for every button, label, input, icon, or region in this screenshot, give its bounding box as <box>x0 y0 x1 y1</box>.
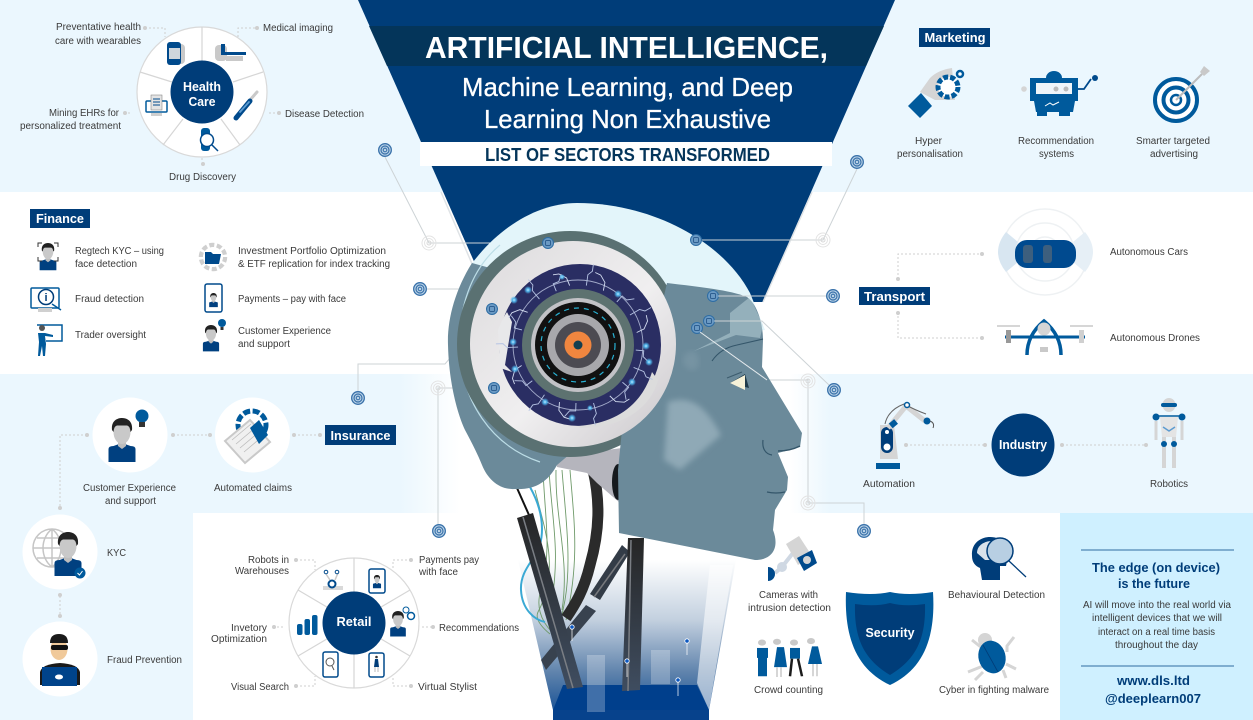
icon: phone with stylist <box>369 653 384 677</box>
head leader lines <box>700 296 829 385</box>
connectors <box>904 443 1148 447</box>
labels: and support <box>105 496 156 507</box>
blue wire <box>521 487 545 622</box>
tag: Finance <box>36 211 84 226</box>
callout links: @deeplearn007 <box>1105 691 1201 706</box>
callout body: AI will move into the real world via <box>1083 600 1231 611</box>
base indicator dots <box>570 625 689 696</box>
icon: target <box>1155 66 1210 121</box>
labels <box>863 479 1188 490</box>
icon: person bulb <box>203 319 226 351</box>
tag <box>919 28 990 47</box>
black cable <box>566 470 598 618</box>
icon: recommendation person <box>390 607 414 637</box>
labels: Investment Portfolio Optimization <box>238 246 386 257</box>
icon: inventory bars <box>297 615 318 635</box>
panel: insurance <box>22 398 396 696</box>
labels: Payments pay <box>419 555 479 566</box>
subtitle banner: LIST OF SECTORS TRANSFORMED <box>485 145 770 165</box>
icon: humanoid robot <box>1152 398 1186 468</box>
circle: automated claims <box>215 398 290 472</box>
labels: Preventative health <box>56 22 141 33</box>
labels: Customer Experience <box>83 483 176 494</box>
icon: camera <box>768 536 817 581</box>
icon: test pen <box>236 92 257 118</box>
labels: Robotics <box>1150 479 1188 490</box>
icon: medical imaging <box>215 44 246 61</box>
icon: fraud monitor: i <box>44 292 48 304</box>
labels <box>748 590 1049 696</box>
icon: autonomous car <box>998 209 1093 295</box>
circuit disc <box>496 264 661 428</box>
labels: personalized treatment <box>20 121 121 132</box>
green wires <box>535 470 575 634</box>
labels: Customer Experience <box>238 326 331 337</box>
labels: Virtual Stylist <box>418 682 477 693</box>
labels <box>83 483 292 666</box>
labels: Medical imaging <box>263 23 333 34</box>
labels: Recommendation <box>1018 136 1094 147</box>
helmet rim highlight <box>460 245 540 462</box>
helmet glass <box>470 203 765 340</box>
callout body: intelligent devices that we will <box>1092 613 1222 624</box>
thin cable <box>517 488 529 515</box>
base platform <box>518 560 736 720</box>
panel: finance <box>30 209 390 356</box>
labels: and support <box>238 339 290 350</box>
icon: hand with gear <box>908 68 963 118</box>
icon: autonomous drone <box>997 321 1093 355</box>
panel: industry <box>863 398 1188 490</box>
labels <box>75 246 390 350</box>
labels: KYC <box>107 548 126 559</box>
labels: care with wearables <box>55 36 141 47</box>
icon: face scan <box>38 243 58 270</box>
icon: trader <box>37 325 62 356</box>
wheel: Health <box>183 79 221 94</box>
labels: Autonomous Drones <box>1110 333 1200 344</box>
panel: health care <box>20 22 364 183</box>
circle: KYC <box>22 514 98 590</box>
panel: edge callout <box>1060 513 1253 720</box>
labels: Smarter targeted <box>1136 136 1210 147</box>
labels: Crowd counting <box>754 685 823 696</box>
callout body: throughout the day <box>1115 640 1198 651</box>
wheel <box>289 558 419 688</box>
callout heading: is the future <box>1118 576 1190 591</box>
labels <box>20 22 364 183</box>
background: left band <box>0 374 400 720</box>
icon: watch <box>167 42 185 65</box>
labels: Behavioural Detection <box>948 590 1045 601</box>
icon: phone with face <box>369 569 385 593</box>
title line three: Learning Non Exhaustive <box>484 104 771 134</box>
title line one: ARTIFICIAL INTELLIGENCE, <box>425 30 828 65</box>
labels: Mining EHRs for <box>49 108 120 119</box>
labels: Payments – pay with face <box>238 294 346 305</box>
connectors <box>123 26 281 166</box>
panel: transport <box>859 209 1200 355</box>
labels: Invetory <box>231 623 267 634</box>
background: right band fade <box>790 374 830 513</box>
labels: systems <box>1039 149 1074 160</box>
labels: Cameras with <box>759 590 818 601</box>
labels: intrusion detection <box>748 603 831 614</box>
connectors <box>896 252 984 340</box>
icon: behavioural head <box>972 537 1026 580</box>
title line two: Machine Learning, and Deep <box>462 72 793 102</box>
labels: personalisation <box>897 149 963 160</box>
tag: Insurance <box>330 428 390 443</box>
labels: Visual Search <box>231 682 289 693</box>
icon: robot arm <box>876 402 934 469</box>
icon: recommendation machine <box>1021 71 1098 116</box>
background: right band <box>830 374 1253 513</box>
icon: magnifier vial <box>200 128 218 151</box>
connectors <box>58 433 322 618</box>
target markers <box>351 143 871 538</box>
tag <box>30 209 90 228</box>
connectors <box>272 558 435 688</box>
labels: Recommendations <box>439 623 519 634</box>
icon: phone search <box>323 652 338 677</box>
dark ring <box>457 231 683 457</box>
hub: Industry <box>999 437 1048 452</box>
labels: Disease Detection <box>285 109 364 120</box>
labels: Cyber in fighting malware <box>939 685 1049 696</box>
background: top band <box>0 0 1253 192</box>
robot head illustration <box>448 203 802 720</box>
labels: Regtech KYC – using <box>75 246 164 257</box>
labels: Drug Discovery <box>169 172 236 183</box>
subtitle banner <box>420 142 832 166</box>
neck knob <box>612 464 624 500</box>
labels: with face <box>418 567 458 578</box>
icon: crowd <box>757 638 822 677</box>
labels: Fraud Prevention <box>107 655 182 666</box>
callout heading: The edge (on device) <box>1092 560 1220 575</box>
neck <box>555 448 622 503</box>
tag <box>325 425 396 445</box>
background: left band fade <box>400 374 460 513</box>
slanted arm <box>517 513 583 689</box>
leader lines <box>358 157 864 525</box>
icon: health records <box>146 95 167 116</box>
labels: Robots in <box>248 555 289 566</box>
labels: Trader oversight <box>75 330 146 341</box>
background: retail panel <box>193 513 493 720</box>
labels: Optimization <box>211 634 267 645</box>
wheel <box>137 27 267 157</box>
tag: Marketing <box>924 30 986 45</box>
labels: Automated claims <box>214 483 292 494</box>
vertical arm <box>622 538 644 691</box>
labels <box>211 555 519 693</box>
circle: fraud prevention <box>22 622 98 696</box>
head nodes <box>486 234 718 394</box>
wheel: Care <box>188 94 216 109</box>
callout heading <box>1092 560 1220 591</box>
labels: face detection <box>75 259 137 270</box>
shield <box>846 592 933 685</box>
title <box>420 30 832 166</box>
back of head <box>448 263 610 489</box>
icon: phone face <box>205 284 222 312</box>
wheel: Retail <box>336 614 372 629</box>
callout body: interact on a real time basis <box>1098 627 1215 638</box>
silver disc <box>470 241 676 447</box>
panel: marketing <box>897 28 1210 160</box>
labels: Fraud detection <box>75 294 144 305</box>
icon: warehouse robot <box>323 570 343 590</box>
hub <box>992 414 1054 476</box>
labels: Warehouses <box>235 566 289 577</box>
tag: Transport <box>864 289 926 304</box>
callout links: www.dls.ltd <box>1116 673 1190 688</box>
eye lens rings <box>522 289 634 401</box>
shield: Security <box>866 626 915 640</box>
labels: Autonomous Cars <box>1110 247 1188 258</box>
icon: portfolio gear <box>201 245 225 269</box>
panel: security <box>748 536 1049 696</box>
face <box>618 283 802 560</box>
circle: customer experience <box>92 398 168 472</box>
labels <box>897 136 1210 160</box>
labels: advertising <box>1150 149 1198 160</box>
labels <box>1110 247 1200 344</box>
labels: Automation <box>863 479 915 490</box>
callout body <box>1083 600 1231 651</box>
icon: fraud monitor <box>31 288 61 312</box>
labels: Hyper <box>915 136 943 147</box>
icon: malware bug <box>968 633 1016 680</box>
diagonal arm <box>541 545 630 670</box>
callout links <box>1105 673 1201 706</box>
labels: & ETF replication for index tracking <box>238 259 390 270</box>
title triangle <box>358 0 895 302</box>
panel: retail <box>211 555 519 693</box>
